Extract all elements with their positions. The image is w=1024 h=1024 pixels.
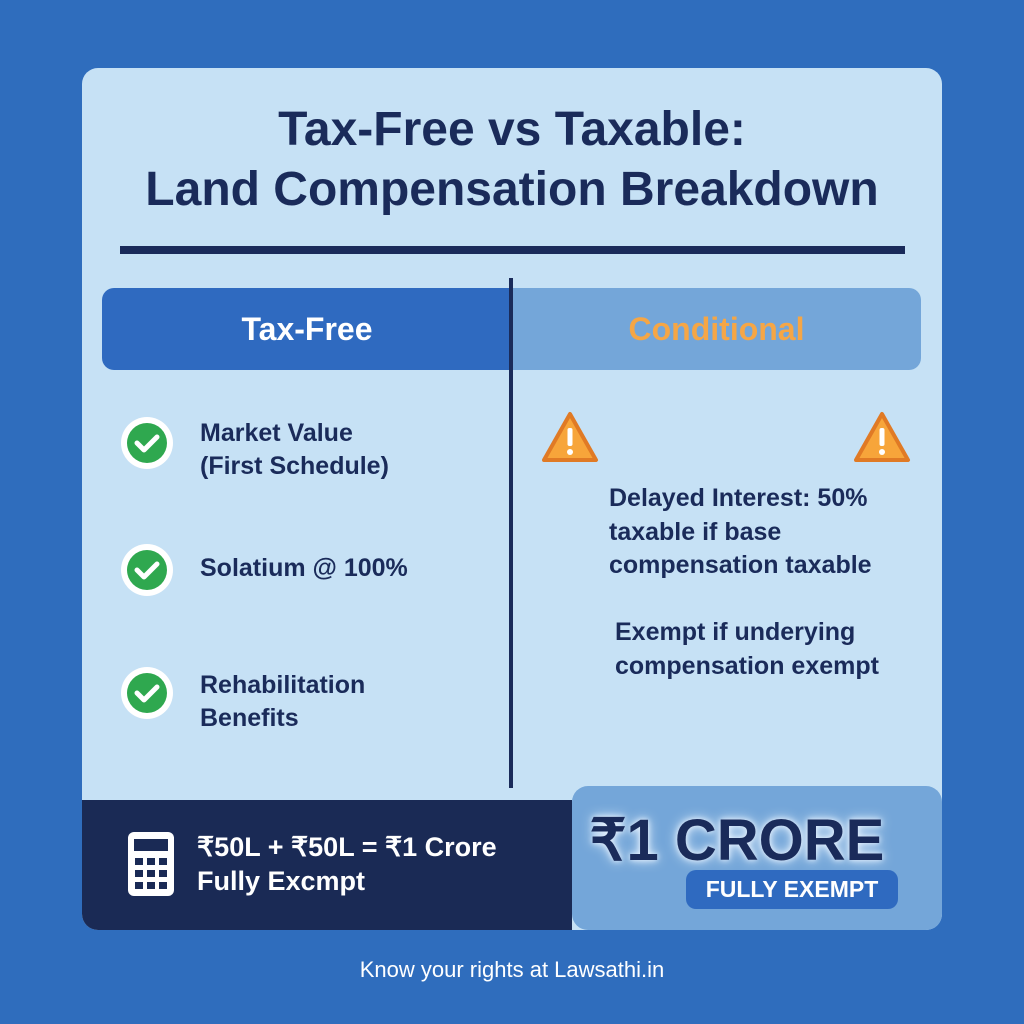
text: delayed interest: compensation taxable <box>609 551 872 579</box>
icon: calculator <box>128 832 174 896</box>
pill: fully exempt: FULLY EXEMPT <box>706 876 878 902</box>
text: exempt: compensation exempt <box>615 652 879 680</box>
item: rehabilitation <box>121 667 365 732</box>
item: rehabilitation: Benefits <box>200 704 299 732</box>
pill: fully exempt <box>686 870 898 909</box>
item: market value: Market Value <box>200 419 353 447</box>
text: exempt: Exempt if underying <box>615 618 855 646</box>
text: calculation: ₹50L + ₹50L = ₹1 Crore <box>197 832 497 862</box>
header: conditional: Conditional <box>629 311 804 347</box>
header: tax-free: Tax-Free <box>241 311 372 347</box>
header: conditional <box>512 288 921 370</box>
title rule <box>120 246 905 254</box>
text: exempt <box>615 618 879 680</box>
text: calculation <box>197 832 497 896</box>
card <box>82 68 942 930</box>
title <box>145 103 879 216</box>
header: tax-free <box>102 288 512 370</box>
icon: check <box>121 417 173 469</box>
divider <box>509 278 513 788</box>
bottom right panel <box>572 786 942 930</box>
text: delayed interest: taxable if base <box>609 518 781 546</box>
icon: warning left <box>542 412 598 462</box>
item: market value: (First Schedule) <box>200 452 389 480</box>
text: delayed interest <box>609 484 872 579</box>
footer: Know your rights at Lawsathi.in <box>360 957 664 982</box>
big amount: ₹1 CRORE <box>590 808 884 873</box>
title: Land Compensation Breakdown <box>145 163 879 216</box>
title: Tax-Free vs Taxable: <box>278 103 746 156</box>
item: solatium: Solatium @ 100% <box>200 554 408 582</box>
bottom left panel <box>82 800 572 930</box>
item: market value <box>121 417 389 480</box>
text: calculation: Fully Excmpt <box>197 866 365 896</box>
text: delayed interest: Delayed Interest: 50% <box>609 484 867 512</box>
item: rehabilitation: Rehabilitation <box>200 671 365 699</box>
item: solatium <box>121 544 408 596</box>
icon: warning right <box>854 412 910 462</box>
